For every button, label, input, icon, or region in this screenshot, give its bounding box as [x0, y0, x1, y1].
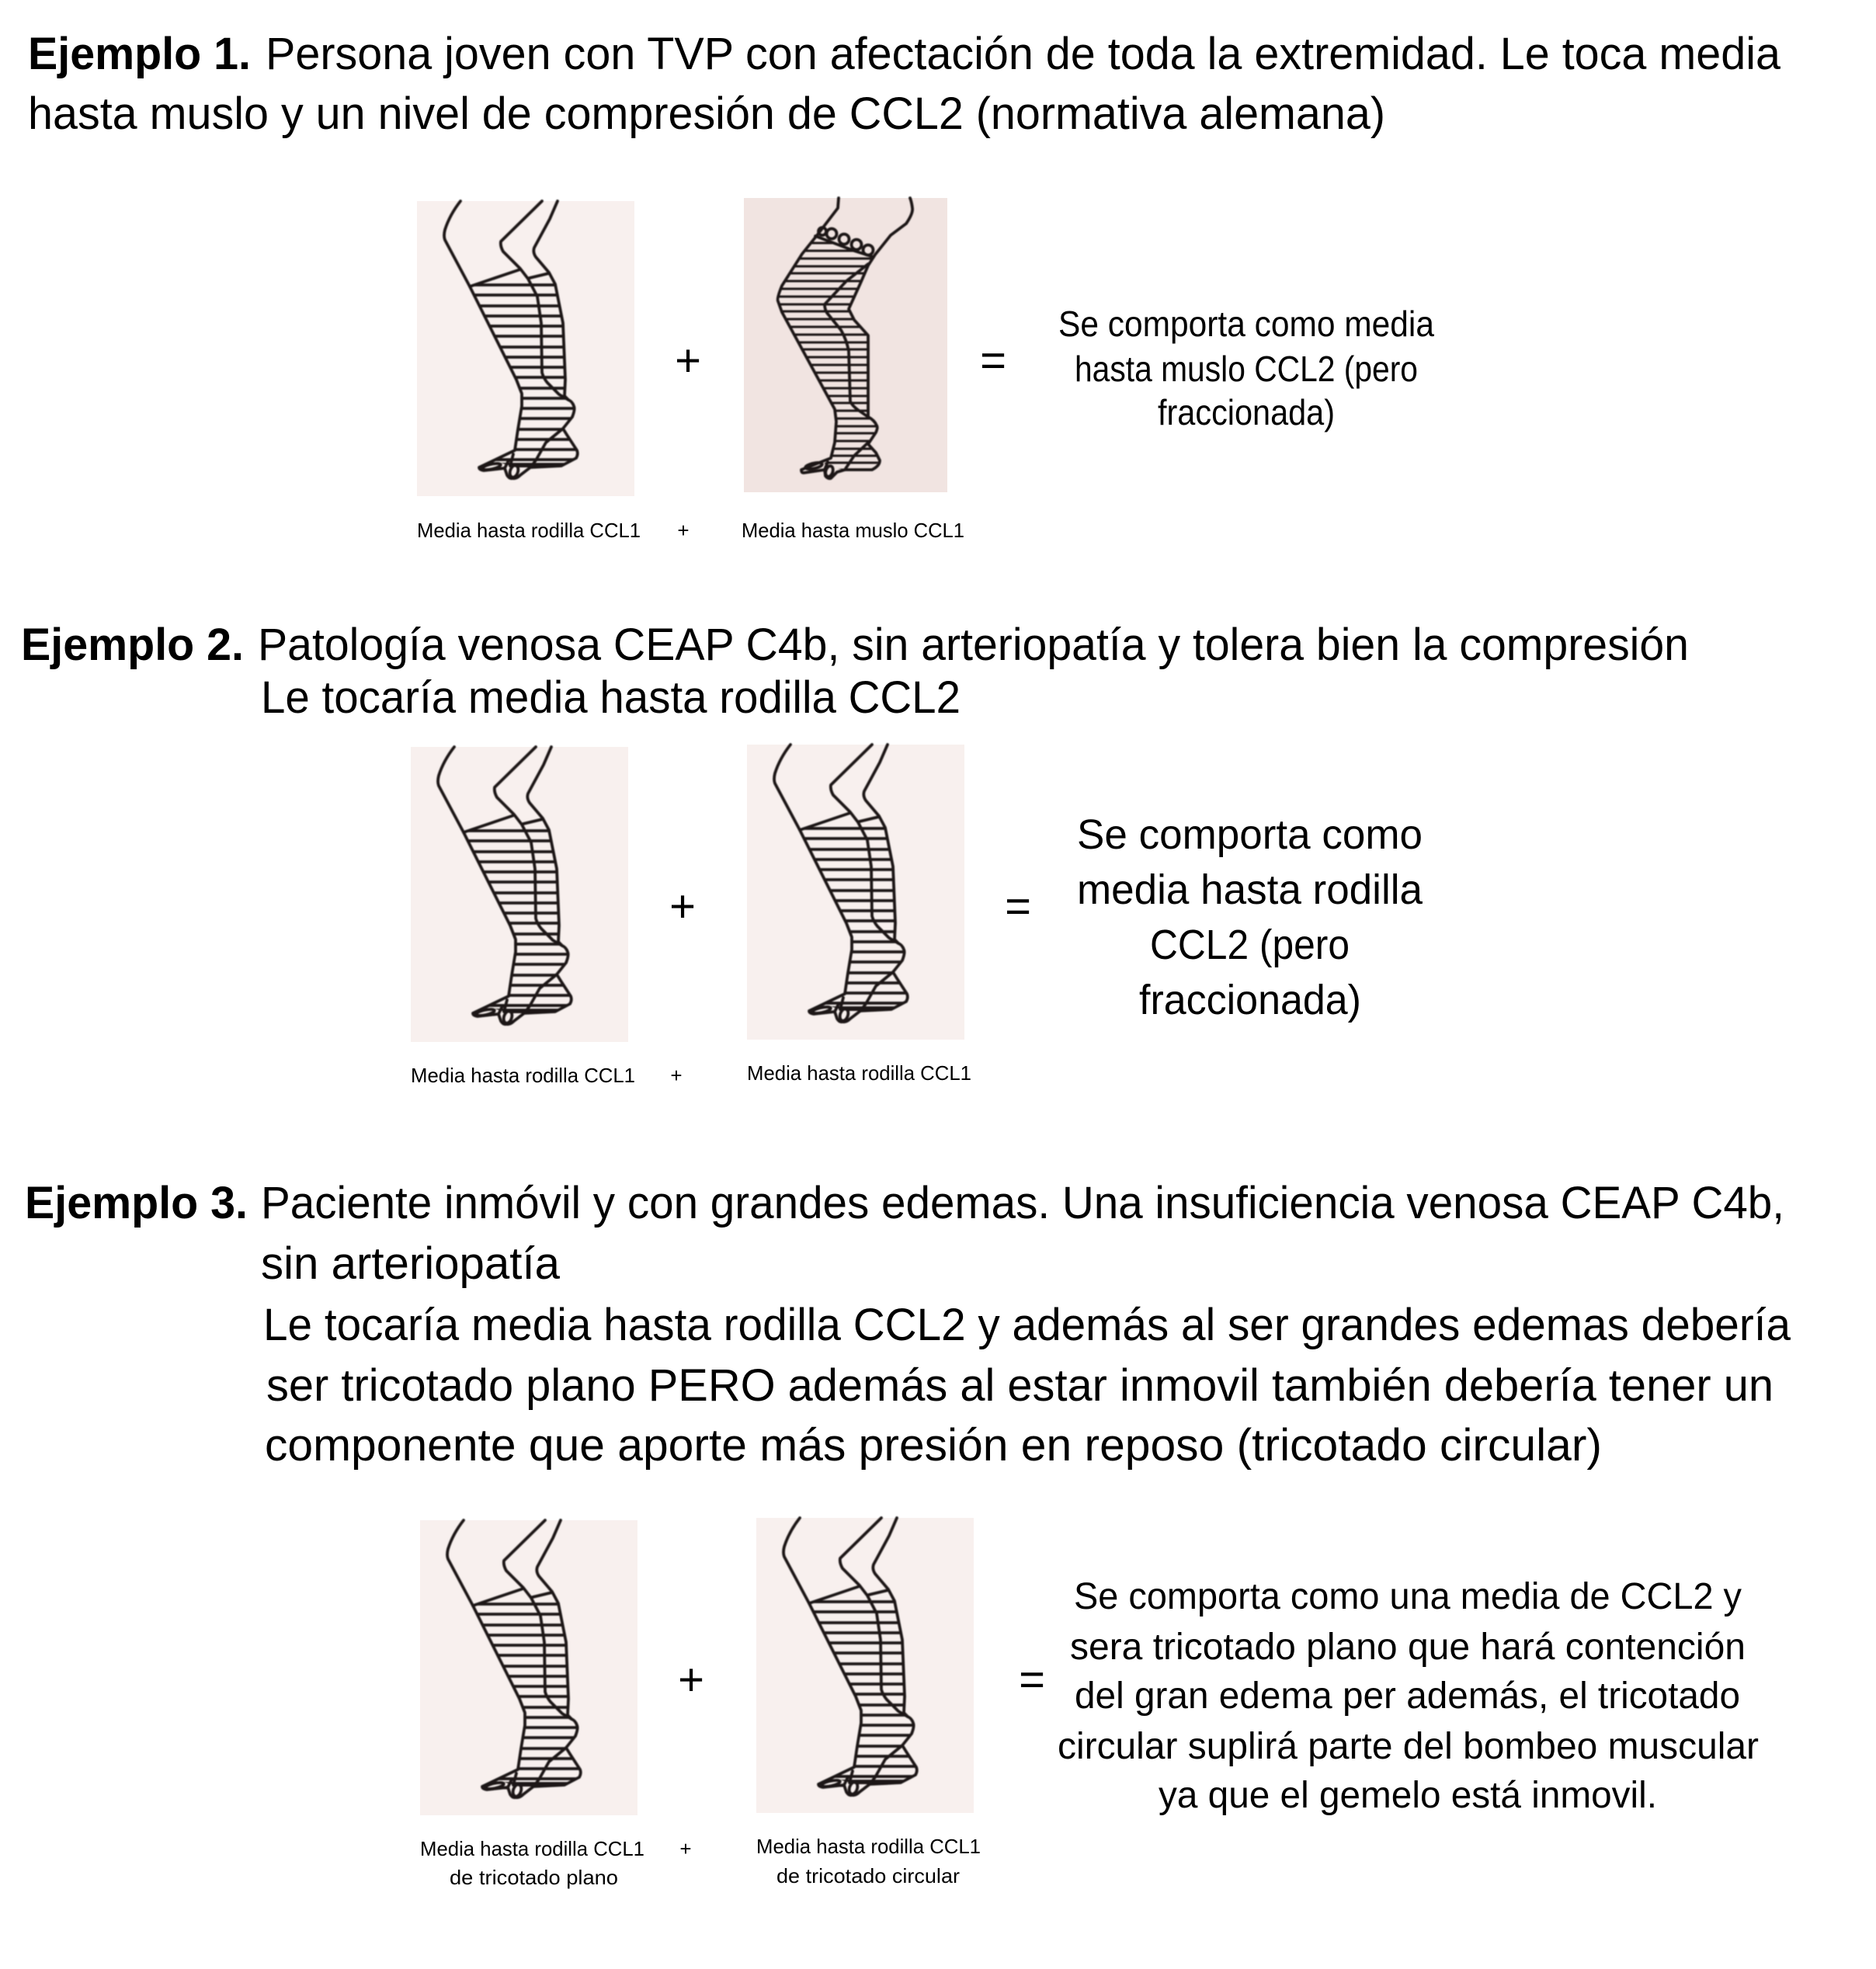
- heading: ejemplo 3: Le tocaría media hasta rodilla CCL2 y además al ser grandes edemas debería: [263, 1300, 1791, 1350]
- heading: ejemplo 3: Ejemplo 3.: [25, 1178, 248, 1228]
- result text, example 3: ya que el gemelo está inmovil.: [1159, 1775, 1657, 1816]
- plus sign, example 2: +: [669, 881, 696, 932]
- result text, example 2: CCL2 (pero: [1150, 922, 1350, 968]
- result text, example 1: fraccionada): [1158, 392, 1335, 432]
- captions, example 3: Media hasta rodilla CCL1: [756, 1835, 981, 1858]
- result text, example 3: del gran edema per además, el tricotado: [1075, 1676, 1740, 1717]
- panel: leg thigh-high stocking, example 1: [744, 198, 947, 492]
- captions, example 1: Media hasta muslo CCL1: [742, 519, 964, 542]
- panel: leg knee-high stocking, example 1: [417, 201, 634, 496]
- panel: leg knee-high stocking left, example 2: [411, 747, 628, 1042]
- heading: ejemplo 1: hasta muslo y un nivel de compresión de CCL2 (normativa alemana): [28, 89, 1385, 139]
- plus sign, example 1: +: [675, 335, 701, 386]
- captions, example 1: +: [677, 519, 690, 542]
- heading: ejemplo 3: sin arteriopatía: [261, 1238, 561, 1289]
- captions, example 3: de tricotado plano: [450, 1866, 618, 1889]
- result text, example 1: [1058, 304, 1434, 432]
- result text, example 3: sera tricotado plano que hará contención: [1070, 1627, 1746, 1668]
- panel: leg knee-high flat-knit stocking, example 3: [420, 1520, 637, 1815]
- heading: ejemplo 3: componente que aporte más presión en reposo (tricotado circular): [265, 1420, 1602, 1471]
- equals sign, example 2: =: [1005, 881, 1031, 932]
- captions, example 3: +: [679, 1837, 692, 1860]
- result text, example 3: Se comporta como una media de CCL2 y: [1074, 1576, 1742, 1617]
- heading: ejemplo 3: [25, 1178, 1791, 1471]
- heading: ejemplo 3: ser tricotado plano PERO además al estar inmovil también debería tener un: [266, 1360, 1774, 1411]
- panel: leg knee-high circular-knit stocking, example 3: [756, 1518, 974, 1813]
- captions, example 3: de tricotado circular: [776, 1864, 960, 1887]
- panel: leg knee-high stocking right, example 2: [747, 745, 964, 1040]
- result text, example 2: media hasta rodilla: [1077, 866, 1423, 913]
- captions, example 2: Media hasta rodilla CCL1: [747, 1061, 971, 1085]
- equals sign, example 1: =: [980, 335, 1006, 386]
- equals sign, example 3: =: [1019, 1655, 1045, 1705]
- captions, example 2: [411, 1061, 971, 1087]
- result text, example 1: Se comporta como media: [1058, 304, 1434, 344]
- heading: ejemplo 1: [28, 29, 1781, 139]
- captions, example 3: [420, 1835, 981, 1889]
- result text, example 2: Se comporta como: [1077, 811, 1423, 858]
- result text, example 1: hasta muslo CCL2 (pero: [1075, 349, 1418, 389]
- heading: ejemplo 2: Patología venosa CEAP C4b, sin arteriopatía y tolera bien la compresión: [258, 620, 1689, 670]
- heading: ejemplo 2: [21, 620, 1689, 723]
- captions, example 2: +: [670, 1064, 683, 1087]
- plus sign, example 3: +: [678, 1655, 704, 1705]
- captions, example 2: Media hasta rodilla CCL1: [411, 1064, 635, 1087]
- captions, example 3: Media hasta rodilla CCL1: [420, 1837, 644, 1860]
- heading: ejemplo 3: Paciente inmóvil y con grandes edemas. Una insuficiencia venosa CEAP C4b,: [261, 1178, 1784, 1228]
- captions, example 1: [417, 519, 964, 542]
- result text, example 3: [1058, 1576, 1759, 1816]
- heading: ejemplo 2: Le tocaría media hasta rodilla CCL2: [261, 672, 961, 723]
- heading: ejemplo 2: Ejemplo 2.: [21, 620, 244, 670]
- heading: ejemplo 1: Persona joven con TVP con afectación de toda la extremidad. Le toca media: [266, 29, 1781, 79]
- captions, example 1: Media hasta rodilla CCL1: [417, 519, 641, 542]
- heading: ejemplo 1: Ejemplo 1.: [28, 29, 251, 79]
- result text, example 3: circular suplirá parte del bombeo muscular: [1058, 1726, 1759, 1767]
- result text, example 2: [1077, 811, 1423, 1023]
- result text, example 2: fraccionada): [1139, 977, 1361, 1023]
